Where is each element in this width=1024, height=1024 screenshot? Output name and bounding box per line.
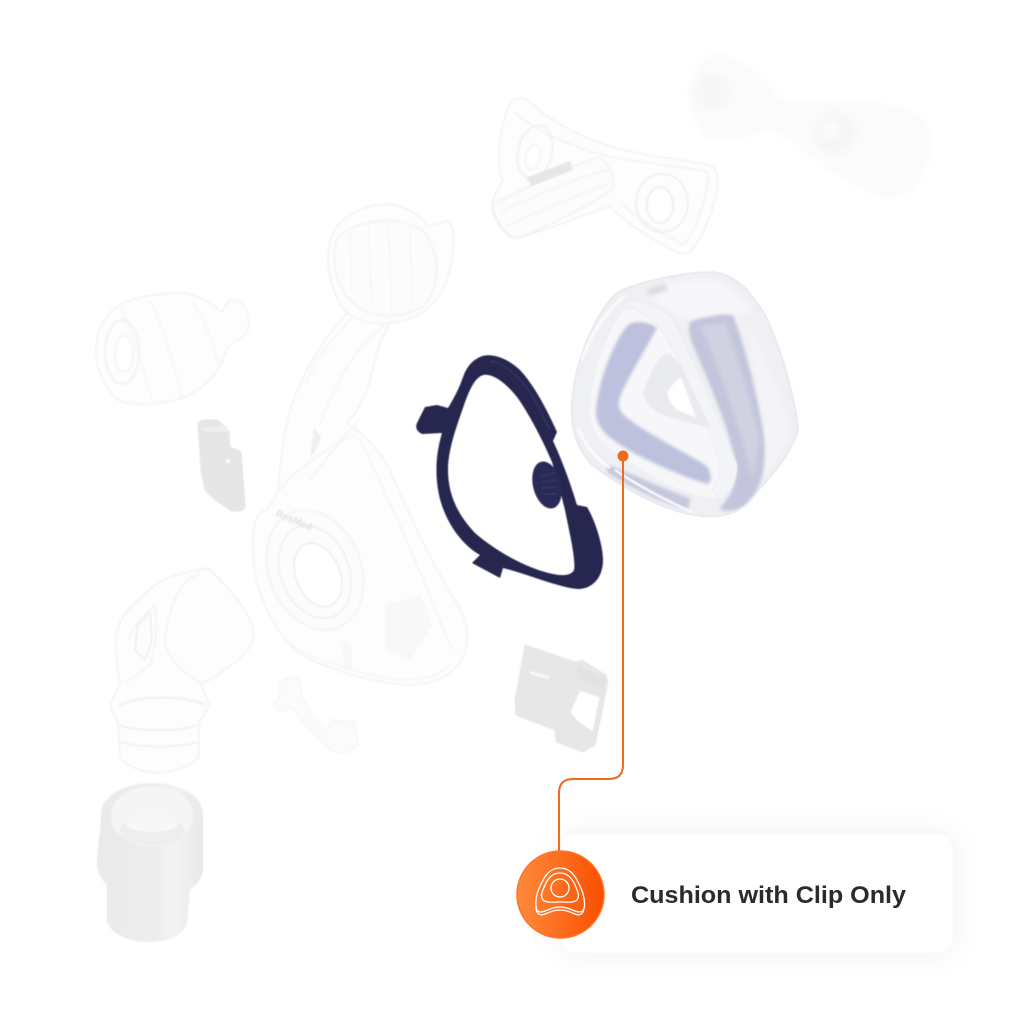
cushion blue band right: [689, 315, 765, 511]
cushion top highlight: [640, 279, 752, 320]
part: mask frame with swivel arm: ResMed: [274, 509, 314, 533]
part: tube connector: [97, 783, 203, 942]
part: blurred headgear pad: [688, 54, 930, 198]
part: grey headgear clip: [515, 645, 608, 752]
icon: cushion badge: [517, 851, 604, 938]
callout label: Cushion with Clip Only: [631, 882, 906, 909]
part: mask frame with swivel arm: [249, 204, 468, 685]
cushion lower blue band: [607, 465, 690, 510]
part: navy clip: [416, 355, 603, 589]
part: elbow connector: [111, 568, 254, 773]
cushion nose opening: [643, 354, 711, 428]
callout card: [560, 834, 953, 953]
leader line: [559, 450, 628, 852]
cushion right band shading: [700, 322, 760, 480]
part: small bridge bar: [273, 678, 358, 753]
cushion body: [572, 272, 798, 517]
cushion grey top shade: [645, 283, 668, 296]
part: silicone cushion: [572, 272, 798, 517]
cushion inner recess: [590, 309, 737, 498]
cushion right wall: [745, 320, 790, 478]
part: grey side clip: [198, 420, 245, 511]
cushion flap: [622, 300, 737, 500]
cushion rim highlights: [578, 296, 692, 512]
cushion blue band left: [596, 322, 711, 484]
part: forehead support: [492, 98, 718, 254]
part: exhalation swivel: [96, 293, 249, 405]
